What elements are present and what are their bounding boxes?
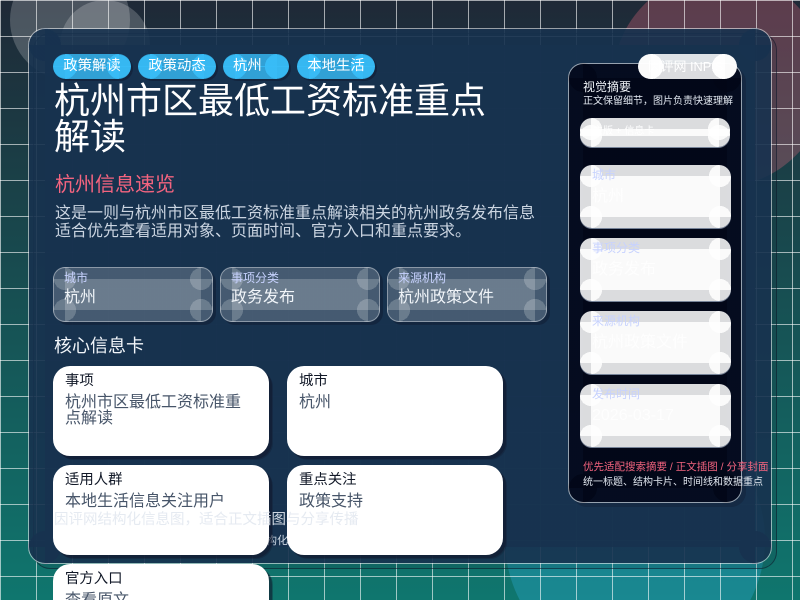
- tag: 政策动态: 政策动态: [148, 58, 206, 74]
- intro text: 这是一则与杭州市区最低工资标准重点解读相关的杭州政务发布信息: [55, 205, 535, 222]
- info card: 官方入口: [53, 564, 269, 600]
- side panel: [568, 63, 742, 503]
- metric: 城市: [53, 267, 213, 322]
- tag: 政策解读: [53, 54, 131, 79]
- side card: 事项分类: [580, 238, 731, 301]
- tags row: [53, 54, 377, 81]
- info card: 官方入口: 官方入口: [65, 571, 123, 587]
- brand pill: 因评网 INPIS: [648, 59, 723, 74]
- metric: 来源机构: 杭州政策文件: [398, 289, 494, 306]
- background circle: bottom teal: [505, 410, 765, 600]
- side note highlight: 优先适配搜索摘要 / 正文插图 / 分享封面: [583, 461, 769, 473]
- section heading: 核心信息卡: [54, 336, 144, 356]
- metric: 来源机构: [387, 267, 547, 322]
- side card: 事项分类: 政务发布: [592, 261, 656, 278]
- metric: 事项分类: 事项分类: [231, 271, 279, 285]
- tag: 本地生活: [297, 54, 375, 79]
- tag: 杭州: 杭州: [233, 58, 262, 74]
- tag: 本地生活: 本地生活: [307, 58, 365, 74]
- background circle: top-left small: [60, 0, 150, 90]
- side card: 发布时间: 发布时间: [592, 387, 640, 401]
- side card: 来源机构: 来源机构: [592, 314, 640, 328]
- info card: 重点关注: 重点关注: [299, 472, 357, 488]
- metric: 城市: 城市: [64, 271, 88, 285]
- brand pill: [638, 54, 737, 79]
- tag: 政策动态: [138, 54, 216, 79]
- info card: 城市: [287, 366, 503, 456]
- intro text: 适合优先查看适用对象、页面时间、官方入口和重点要求。: [55, 223, 471, 240]
- side card: 来源机构: [580, 311, 731, 374]
- info card: 重点关注: [287, 465, 503, 555]
- subtitle: 杭州信息速览: [55, 174, 175, 196]
- background circle: top-right pink: [613, 0, 800, 187]
- info card: 事项: 事项: [65, 373, 94, 389]
- side card: 发布时间: [580, 384, 731, 447]
- side heading: 视觉摘要: [583, 80, 631, 94]
- side card: 发布时间: 2026-03-17: [592, 407, 674, 424]
- info card: 适用人群: 本地生活信息关注用户: [65, 493, 225, 510]
- info card: 重点关注: 政策支持: [299, 493, 363, 510]
- info card: 事项: [53, 366, 269, 456]
- intro text: [55, 204, 535, 240]
- metric: 城市: 杭州: [64, 289, 96, 306]
- metric: 事项分类: 政务发布: [231, 289, 295, 306]
- info card: 城市: 杭州: [299, 394, 331, 411]
- side card: format: 主版 + 信息卡: [593, 126, 654, 137]
- side card: 事项分类: 事项分类: [592, 241, 640, 255]
- side card: 来源机构: 杭州政策文件: [592, 334, 688, 351]
- info card: 城市: 城市: [299, 373, 328, 389]
- tag: 杭州: [223, 54, 289, 79]
- info card: 适用人群: [53, 465, 269, 555]
- side card: 城市: [580, 165, 731, 228]
- title: 杭州市区最低工资标准重点解读: [54, 80, 486, 157]
- info card: 事项: 杭州市区最低工资标准重点解读: [65, 394, 241, 427]
- background circle: top-left large: [10, 0, 130, 80]
- metric: 事项分类: [220, 267, 380, 322]
- side note: 统一标题、结构卡片、时间线和数据重点: [583, 477, 763, 488]
- side description: 正文保留细节，图片负责快速理解: [583, 96, 733, 107]
- footer line behind cards: 构化: [266, 535, 288, 547]
- side card: format: [580, 118, 730, 147]
- side card: 城市: 城市: [592, 168, 616, 182]
- tag: 政策解读: 政策解读: [63, 58, 121, 74]
- info card: 适用人群: 适用人群: [65, 472, 123, 488]
- side card: 城市: 杭州: [592, 188, 624, 205]
- footer caption: 因评网结构化信息图，适合正文插图与分享传播: [54, 512, 358, 528]
- metric: 来源机构: 来源机构: [398, 271, 446, 285]
